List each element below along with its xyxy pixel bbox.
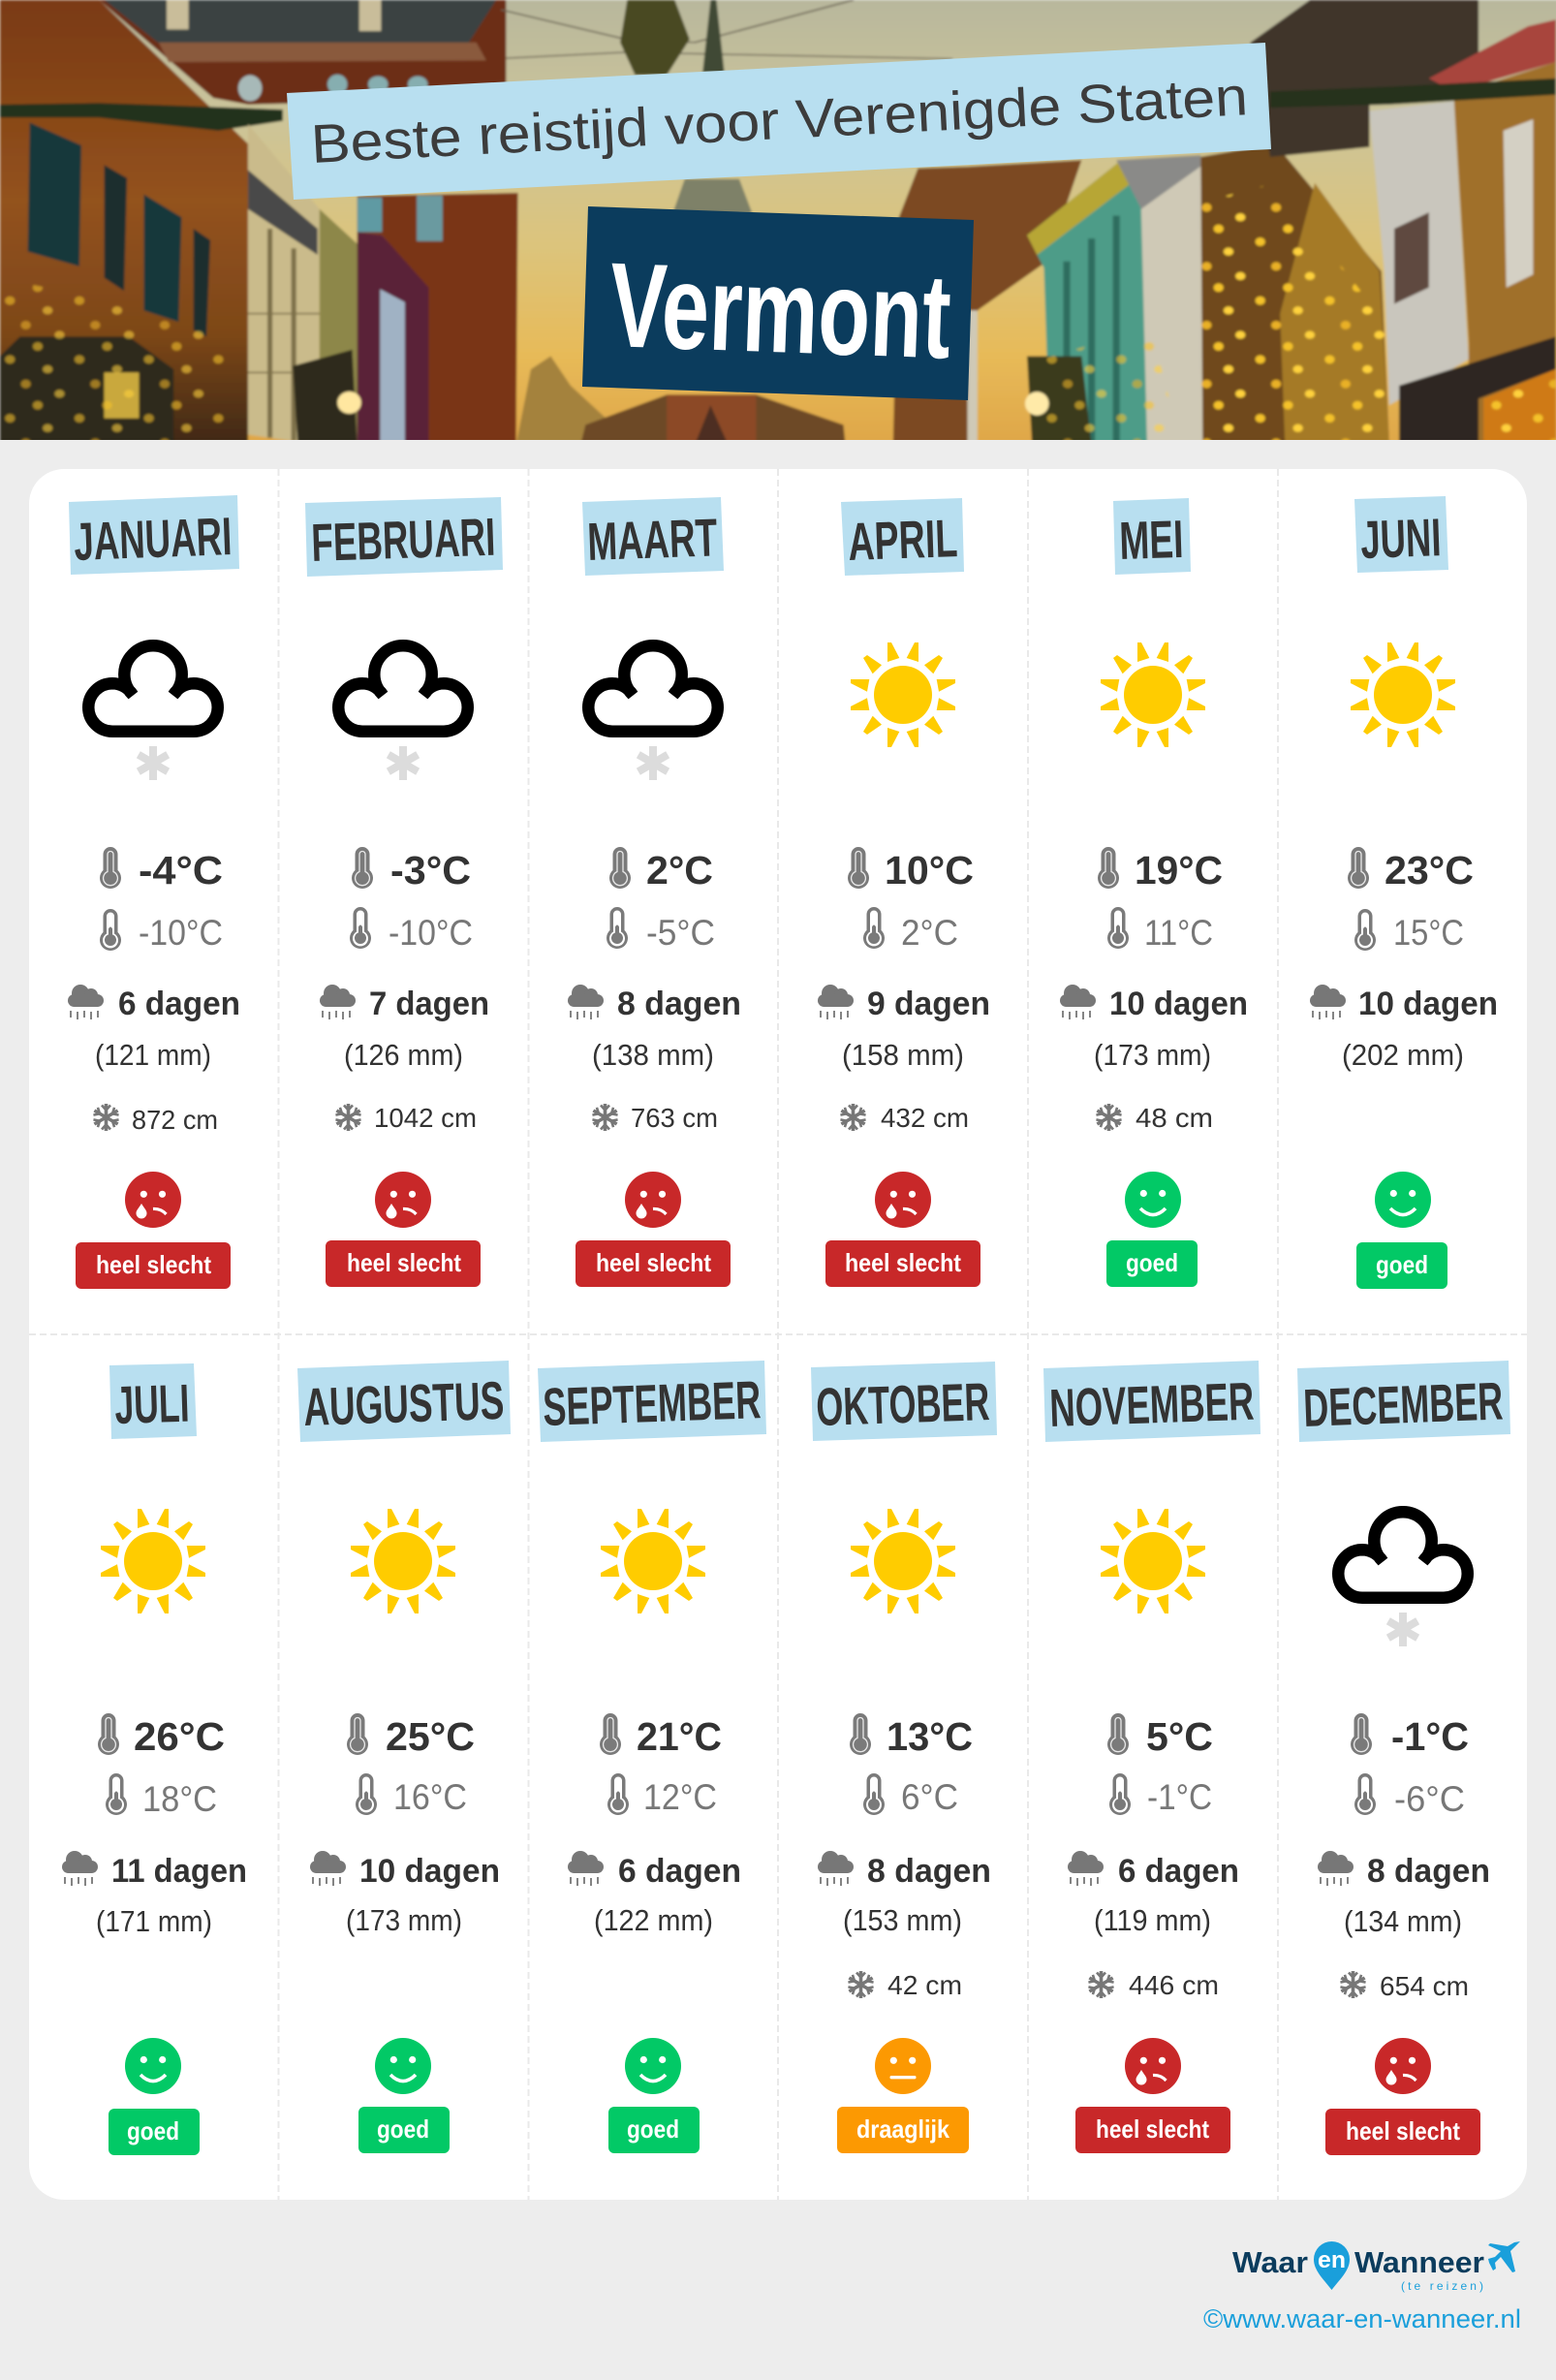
snowfall: 446 cm bbox=[1129, 1970, 1219, 2000]
rating face bbox=[875, 2038, 931, 2094]
min temperature bbox=[106, 1773, 217, 1819]
max temperature bbox=[848, 847, 974, 892]
rating badge: goed bbox=[627, 2114, 679, 2144]
rain days: 7 dagen bbox=[369, 986, 489, 1022]
min temperature bbox=[350, 907, 473, 953]
rating face bbox=[1125, 2038, 1181, 2094]
min temperature: 12°C bbox=[643, 1777, 717, 1817]
max temperature: 25°C bbox=[386, 1714, 475, 1759]
snowfall bbox=[839, 1103, 969, 1133]
rating badge: heel slecht bbox=[96, 1250, 211, 1279]
month label bbox=[69, 495, 239, 575]
min temperature bbox=[1354, 909, 1464, 953]
icon: snow cloud bbox=[88, 645, 218, 780]
min temperature: 11°C bbox=[1144, 913, 1213, 953]
logo: Waar en Wanneer: (te reizen) bbox=[1401, 2279, 1483, 2293]
min temperature bbox=[863, 1773, 958, 1817]
icon: sun bbox=[1351, 642, 1455, 747]
max temperature: -4°C bbox=[139, 848, 223, 892]
min temperature bbox=[607, 1773, 717, 1817]
month label bbox=[538, 1361, 766, 1442]
rain days: 9 dagen bbox=[867, 986, 990, 1022]
panel: oktober bbox=[811, 1362, 997, 2153]
min temperature bbox=[100, 909, 223, 953]
rating badge bbox=[358, 2107, 450, 2153]
month label: NOVEMBER bbox=[1048, 1371, 1255, 1438]
rating badge bbox=[326, 1240, 481, 1287]
month label bbox=[297, 1361, 511, 1442]
rain days bbox=[1318, 1851, 1490, 1890]
rain days bbox=[320, 985, 489, 1022]
min temperature bbox=[607, 907, 715, 953]
max temperature: -1°C bbox=[1391, 1714, 1469, 1759]
icon: snow cloud bbox=[1338, 1512, 1468, 1646]
rain days: 8 dagen bbox=[1367, 1853, 1490, 1890]
month label: FEBRUARI bbox=[310, 507, 496, 573]
rain days bbox=[568, 1851, 741, 1890]
rating face bbox=[1375, 1172, 1431, 1228]
max temperature bbox=[600, 1713, 722, 1759]
rating face bbox=[375, 1172, 431, 1228]
icon: sun bbox=[1101, 642, 1205, 747]
rain days bbox=[568, 985, 741, 1022]
max temperature: 13°C bbox=[887, 1714, 973, 1759]
min temperature bbox=[863, 907, 958, 953]
rating badge: draaglijk bbox=[856, 2114, 949, 2144]
min temperature: 2°C bbox=[901, 913, 958, 953]
panel: juni bbox=[1310, 496, 1498, 1289]
min temperature: 16°C bbox=[393, 1777, 467, 1817]
min temperature bbox=[1354, 1773, 1465, 1819]
panel: augustus bbox=[297, 1361, 511, 2153]
icon: sun bbox=[601, 1509, 705, 1613]
rain days: 6 dagen bbox=[1118, 1853, 1239, 1890]
rain days bbox=[310, 1851, 500, 1890]
rain days: 8 dagen bbox=[617, 986, 741, 1022]
panel: februari bbox=[305, 497, 503, 1287]
rating badge bbox=[1356, 1242, 1447, 1289]
rating badge: heel slecht bbox=[1346, 2116, 1460, 2145]
max temperature bbox=[1348, 847, 1474, 892]
month label: AUGUSTUS bbox=[302, 1370, 505, 1437]
max temperature bbox=[98, 1713, 225, 1759]
month label bbox=[841, 498, 964, 576]
max temperature: 23°C bbox=[1385, 848, 1474, 892]
rating badge bbox=[837, 2107, 969, 2153]
max temperature: 10°C bbox=[885, 848, 974, 892]
snowfall bbox=[1095, 1103, 1213, 1133]
month label bbox=[582, 497, 724, 576]
rating face bbox=[625, 1172, 681, 1228]
month label bbox=[305, 497, 503, 577]
banner: title Vermont bbox=[582, 206, 974, 400]
max temperature: 5°C bbox=[1146, 1714, 1213, 1759]
max temperature: -3°C bbox=[390, 848, 471, 892]
snowfall bbox=[1339, 1971, 1469, 2001]
rating badge bbox=[1075, 2107, 1230, 2153]
rating badge bbox=[576, 1240, 731, 1287]
max temperature: 2°C bbox=[646, 848, 713, 892]
rating face bbox=[125, 1172, 181, 1228]
rating badge bbox=[76, 1242, 231, 1289]
rainfall: (173 mm) bbox=[1094, 1038, 1211, 1072]
rain days: 8 dagen bbox=[867, 1853, 991, 1890]
month label: JULI bbox=[113, 1373, 190, 1435]
rain days bbox=[68, 985, 240, 1022]
icon: sun bbox=[101, 1509, 205, 1613]
min temperature bbox=[1109, 1773, 1212, 1817]
snowfall: 42 cm bbox=[887, 1970, 962, 2000]
rainfall: (121 mm) bbox=[95, 1038, 211, 1072]
month label: MEI bbox=[1118, 509, 1184, 571]
rainfall: (158 mm) bbox=[842, 1038, 964, 1072]
min temperature bbox=[356, 1773, 467, 1817]
rating badge: goed bbox=[1126, 1248, 1178, 1277]
min temperature: -10°C bbox=[139, 913, 223, 953]
month label: SEPTEMBER bbox=[542, 1369, 762, 1437]
max temperature bbox=[1107, 1713, 1213, 1759]
rating badge: heel slecht bbox=[596, 1248, 711, 1277]
month label: APRIL bbox=[847, 508, 958, 572]
snowfall: 1042 cm bbox=[374, 1103, 477, 1133]
min temperature: 15°C bbox=[1393, 913, 1464, 953]
rating face bbox=[625, 2038, 681, 2094]
min temperature: 18°C bbox=[142, 1779, 217, 1819]
min temperature: -1°C bbox=[1147, 1777, 1212, 1817]
snowfall bbox=[92, 1104, 218, 1135]
snowfall: 432 cm bbox=[881, 1103, 969, 1133]
rain days: 10 dagen bbox=[359, 1853, 500, 1890]
max temperature bbox=[352, 847, 471, 892]
max temperature: 21°C bbox=[637, 1714, 722, 1759]
snowfall: 763 cm bbox=[631, 1103, 718, 1133]
rainfall: (119 mm) bbox=[1094, 1903, 1211, 1937]
month label bbox=[811, 1362, 997, 1441]
rain days: 6 dagen bbox=[618, 1853, 741, 1890]
rating face bbox=[875, 1172, 931, 1228]
rainfall: (202 mm) bbox=[1342, 1038, 1464, 1072]
banner: subtitle: Beste reistijd voor Verenigde Staten bbox=[309, 65, 1249, 174]
max temperature bbox=[347, 1713, 475, 1759]
icon: sun bbox=[851, 642, 955, 747]
month label: JANUARI bbox=[73, 506, 233, 572]
month label bbox=[1354, 496, 1448, 573]
rating badge: heel slecht bbox=[845, 1248, 961, 1277]
rating badge: goed bbox=[1376, 1250, 1428, 1279]
max temperature bbox=[609, 847, 713, 892]
min temperature: -5°C bbox=[646, 913, 715, 953]
banner: subtitle bbox=[287, 43, 1271, 200]
snowfall bbox=[591, 1103, 718, 1133]
rainfall: (134 mm) bbox=[1344, 1904, 1462, 1938]
rainfall: (173 mm) bbox=[346, 1903, 462, 1937]
max temperature bbox=[850, 1713, 973, 1759]
rainfall: (153 mm) bbox=[843, 1903, 962, 1937]
banner: title Vermont: Vermont bbox=[607, 238, 953, 385]
panel: juli bbox=[62, 1363, 247, 2155]
rating badge: heel slecht bbox=[347, 1248, 461, 1277]
rating face bbox=[1125, 1172, 1181, 1228]
panel: months card bbox=[29, 469, 1527, 2200]
panel: april bbox=[818, 498, 990, 1287]
rating badge bbox=[1106, 1240, 1198, 1287]
panel: januari bbox=[68, 495, 240, 1289]
icon: map pin bbox=[1314, 2241, 1350, 2290]
month label: JUNI bbox=[1359, 507, 1442, 570]
rating badge: goed bbox=[377, 2114, 429, 2144]
rain days: 10 dagen bbox=[1109, 986, 1248, 1022]
rain days bbox=[62, 1851, 247, 1890]
hero photo: illuminated street bbox=[0, 0, 1556, 445]
rain days: 11 dagen bbox=[111, 1853, 247, 1890]
snowfall bbox=[847, 1970, 962, 2000]
rating badge bbox=[1325, 2109, 1480, 2155]
rain days bbox=[1068, 1851, 1239, 1890]
rating badge: goed bbox=[127, 2116, 179, 2145]
icon: snow cloud bbox=[588, 645, 718, 780]
min temperature bbox=[1107, 907, 1213, 953]
rain days bbox=[818, 985, 990, 1022]
rainfall: (126 mm) bbox=[344, 1038, 463, 1072]
min temperature: -10°C bbox=[389, 913, 473, 953]
month label bbox=[1043, 1361, 1260, 1442]
month label bbox=[109, 1363, 197, 1439]
logo: Waar en Wanneer: Waar bbox=[1232, 2245, 1308, 2279]
snowfall: 872 cm bbox=[132, 1105, 218, 1135]
min temperature: -6°C bbox=[1394, 1779, 1465, 1819]
rain days: 6 dagen bbox=[118, 986, 240, 1022]
max temperature: 19°C bbox=[1135, 848, 1223, 892]
icon: snow cloud bbox=[338, 645, 468, 780]
rating face bbox=[1375, 2038, 1431, 2094]
rating face bbox=[375, 2038, 431, 2094]
panel: maart bbox=[568, 497, 741, 1287]
rating badge: heel slecht bbox=[1096, 2114, 1209, 2144]
rating badge bbox=[608, 2107, 700, 2153]
month label: OKTOBER bbox=[815, 1371, 990, 1437]
max temperature bbox=[1098, 847, 1223, 892]
month label bbox=[1113, 498, 1191, 575]
max temperature bbox=[100, 847, 223, 892]
panel: september bbox=[538, 1361, 766, 2153]
logo: Waar en Wanneer bbox=[1232, 2241, 1520, 2293]
month label: MAART bbox=[586, 507, 718, 572]
icon: plane bbox=[1488, 2241, 1520, 2272]
icon: map pin: en bbox=[1318, 2247, 1346, 2273]
panel: december bbox=[1297, 1361, 1510, 2155]
snowfall: 48 cm bbox=[1136, 1103, 1213, 1133]
max temperature bbox=[1351, 1713, 1469, 1759]
snowfall bbox=[1087, 1970, 1219, 2000]
panel: mei bbox=[1060, 498, 1248, 1287]
logo: Waar en Wanneer: Wanneer bbox=[1354, 2245, 1484, 2279]
rating badge bbox=[109, 2109, 200, 2155]
rainfall: (122 mm) bbox=[594, 1903, 713, 1937]
rainfall: (138 mm) bbox=[592, 1038, 714, 1072]
rating face bbox=[125, 2038, 181, 2094]
icon: sun bbox=[1101, 1509, 1205, 1613]
min temperature: 6°C bbox=[901, 1777, 958, 1817]
max temperature: 26°C bbox=[134, 1714, 225, 1759]
icon: sun bbox=[351, 1509, 455, 1613]
rainfall: (171 mm) bbox=[96, 1904, 212, 1938]
rating badge bbox=[825, 1240, 980, 1287]
snowfall: 654 cm bbox=[1380, 1971, 1469, 2001]
rain days: 10 dagen bbox=[1358, 986, 1498, 1022]
rain days bbox=[818, 1851, 991, 1890]
website credit: ©www.waar-en-wanneer.nl bbox=[1203, 2304, 1521, 2333]
panel: november bbox=[1043, 1361, 1260, 2153]
icon: sun bbox=[851, 1509, 955, 1613]
